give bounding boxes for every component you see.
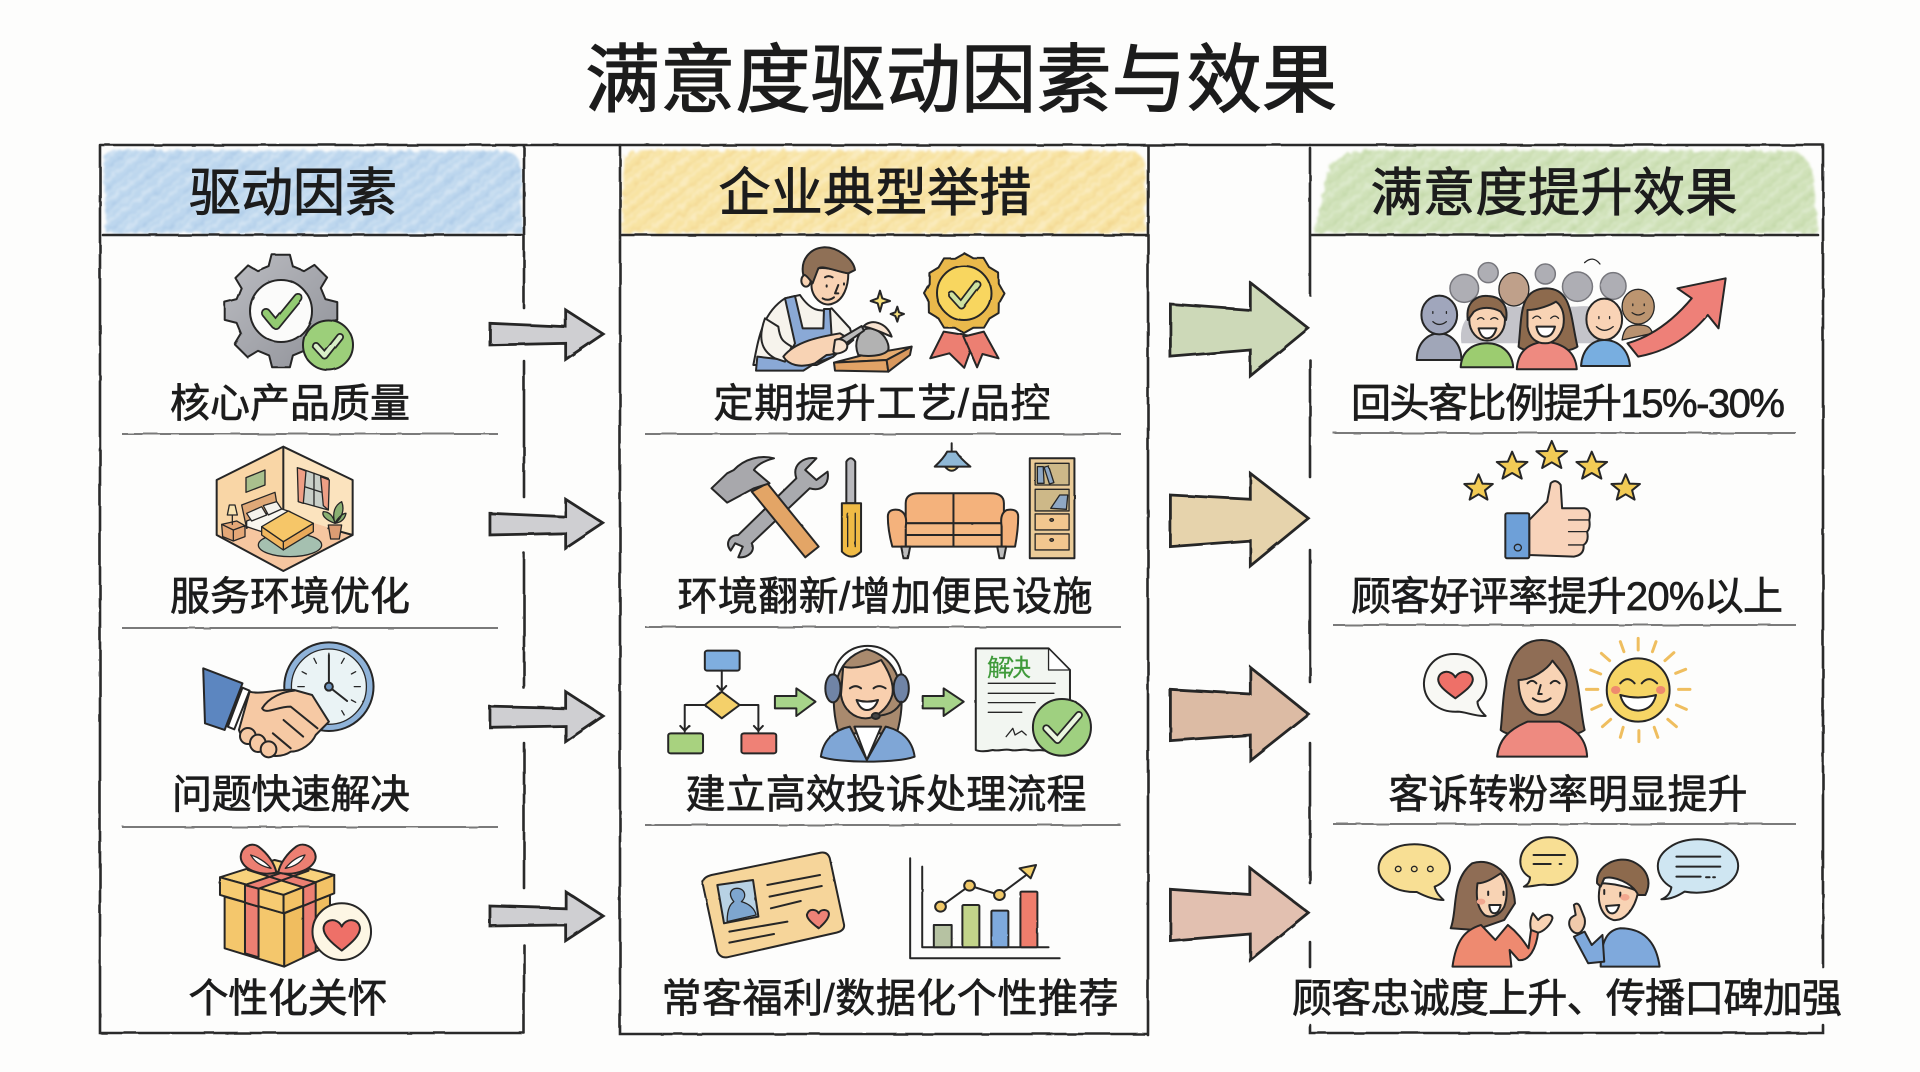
frame: effects column: [1310, 145, 1823, 1033]
label: quick problem solving: 问题快速解决: [172, 773, 410, 817]
icon: thumbs up with stars: [1464, 441, 1640, 558]
arrows: measures to effects: [1170, 283, 1308, 960]
header band: measures: [622, 150, 1146, 233]
label: complaint to fan rate: 客诉转粉率明显提升: [1388, 773, 1748, 817]
dividers: drivers rows: [122, 434, 498, 827]
heading: drivers: 驱动因素: [189, 165, 397, 223]
icon: medal ribbon and rosette: [924, 253, 1004, 367]
frame: measures column: [620, 145, 1310, 1035]
label: renovation and amenities: 环境翻新/增加便民设施: [678, 575, 1092, 619]
arrow: row 4 driver to measure: [490, 892, 603, 941]
icon: tools, sofa, lamp and bookshelf: [712, 443, 1074, 558]
icon: isometric room: [217, 447, 353, 571]
icon: membership card and data chart: [703, 853, 1060, 958]
label: member benefits and personal recommendation: 常客福利/数据化个性推荐: [662, 977, 1118, 1021]
panel: satisfaction effects: [1292, 145, 1842, 1033]
arrow: row 1 driver to measure: [490, 310, 603, 359]
arrow: row 2 measure to effect: [1170, 473, 1308, 566]
label: repeat customers: 回头客比例提升15%-30%: [1351, 382, 1785, 426]
icon: complaint flow, agent and resolved document: [668, 646, 1091, 762]
dividers: measures rows: [645, 434, 1121, 825]
icon: gift with heart: [220, 845, 371, 967]
arrow: row 3 measure to effect: [1170, 667, 1308, 760]
label: core product quality: 核心产品质量: [170, 382, 410, 426]
text: resolved stamp on document: 解决: [987, 655, 1031, 682]
icon: woman with heart bubble and sun: [1424, 638, 1690, 757]
icon: handshake and clock: [203, 642, 374, 757]
dividers: effects rows: [1333, 433, 1796, 824]
label: personalised care: 个性化关怀: [188, 977, 388, 1021]
arrow: row 4 measure to effect: [1170, 868, 1308, 960]
panel: enterprise measures: [620, 145, 1310, 1035]
label: upgrade craft and QC: 定期提升工艺/品控: [714, 382, 1050, 426]
label: complaint process: 建立高效投诉处理流程: [686, 773, 1086, 817]
icon: two customers talking with speech bubbles: [1379, 837, 1738, 967]
label: loyalty and word of mouth: 顾客忠诚度上升、传播口碑加强: [1292, 977, 1842, 1021]
label: service environment: 服务环境优化: [170, 575, 410, 619]
frame: drivers column: [100, 145, 620, 1033]
heading: measures: 企业典型举措: [718, 165, 1032, 223]
header band: drivers: [104, 150, 522, 233]
arrow: row 1 measure to effect: [1170, 283, 1308, 376]
label: positive review rate: 顾客好评率提升20%以上: [1351, 575, 1783, 619]
icon: gear with check: [225, 255, 353, 370]
arrow: row 2 driver to measure: [490, 499, 603, 548]
heading: effects: 满意度提升效果: [1370, 165, 1738, 223]
header band: effects: [1314, 150, 1818, 233]
arrows: drivers to measures: [490, 310, 603, 941]
icon: craftsman polishing a kettle: [753, 247, 912, 372]
panel: drivers: [100, 145, 620, 1033]
title: 满意度驱动因素与效果: [585, 38, 1337, 122]
icon: crowd of happy customers with rising arrow: [1417, 259, 1726, 369]
arrow: row 3 driver to measure: [490, 692, 603, 742]
